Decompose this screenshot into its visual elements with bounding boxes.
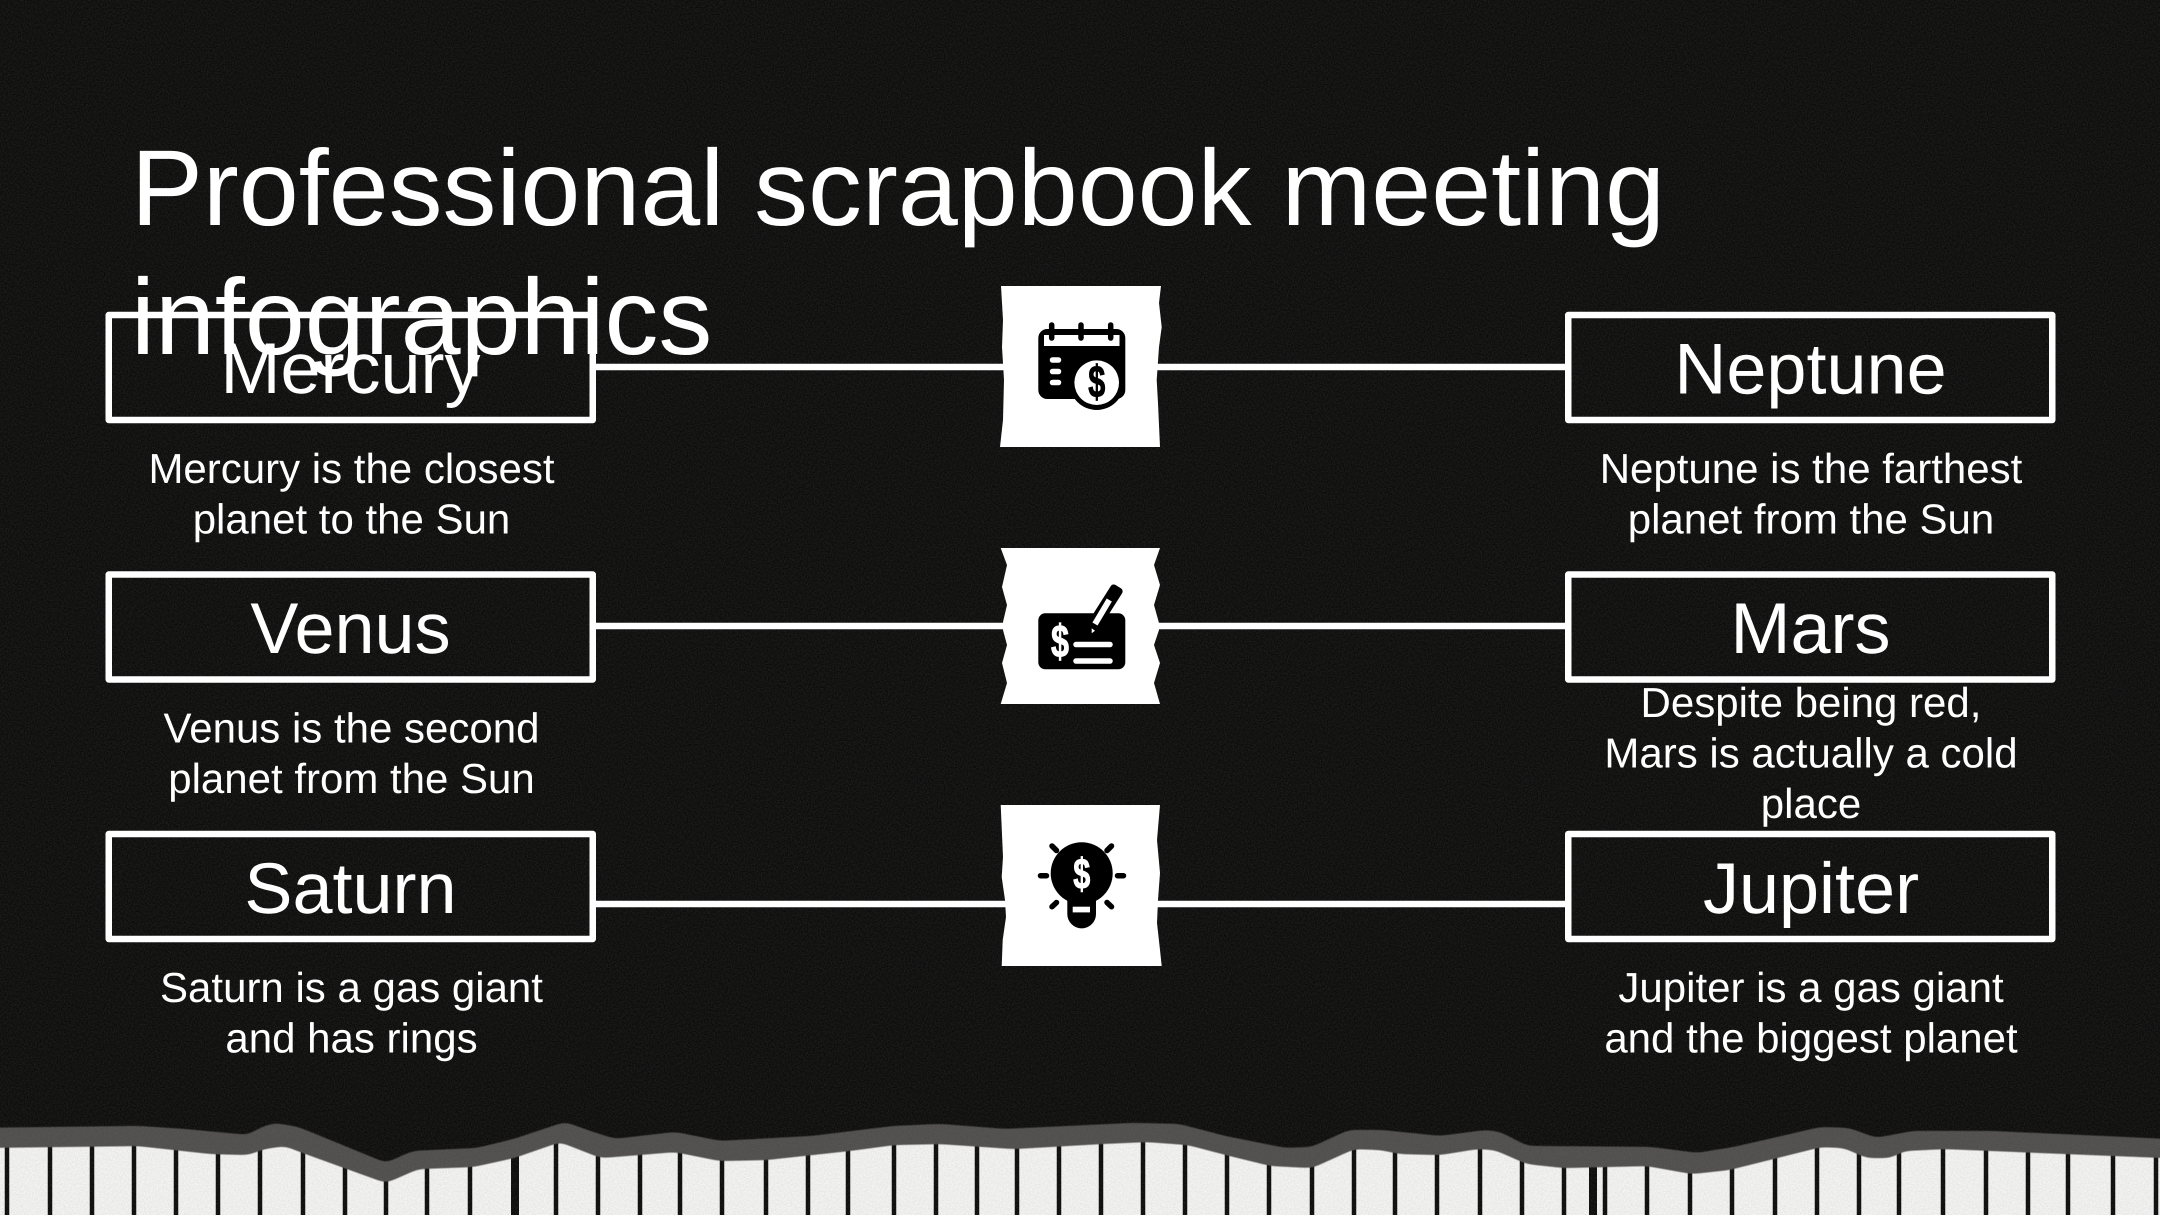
panel: Mercury [109, 315, 593, 542]
title: Professional scrapbook meeting [131, 127, 1665, 248]
Mercury name: Mercury [220, 329, 481, 409]
panel: Jupiter [1568, 834, 2052, 1061]
Mars box [1568, 574, 2052, 680]
Neptune description: planet from the Sun [1628, 495, 1994, 542]
Neptune box [1568, 315, 2052, 420]
Jupiter description: and the biggest planet [1604, 1014, 2018, 1061]
grey torn edge [0, 1123, 2160, 1182]
torn paper strip at bottom [0, 1123, 2160, 1215]
panel: Mars [1568, 574, 2052, 827]
Mars name: Mars [1730, 589, 1890, 669]
title: infographics [131, 256, 712, 377]
icon: cheque with pen: $ [1051, 615, 1069, 667]
Saturn description: and has rings [225, 1014, 478, 1061]
Mercury description: Mercury is the closest [148, 445, 555, 492]
Venus description: Venus is the second [164, 704, 539, 752]
icon: light bulb with dollar [1001, 805, 1162, 966]
white striped paper [0, 1135, 2160, 1215]
Venus description: planet from the Sun [168, 755, 535, 802]
panel: Venus [109, 574, 593, 802]
icon: light bulb with dollar: $ [1073, 850, 1090, 898]
Neptune description: Neptune is the farthest [1600, 445, 2023, 492]
Jupiter description: Jupiter is a gas giant [1618, 964, 2004, 1011]
Jupiter box [1568, 834, 2052, 939]
panel: Saturn [109, 834, 593, 1061]
panel: Neptune [1568, 315, 2052, 542]
Venus name: Venus [250, 589, 451, 669]
icon: cheque with pen [1001, 548, 1160, 704]
Mercury description: planet to the Sun [193, 495, 510, 542]
Mars description: Despite being red, [1641, 679, 1981, 726]
Saturn description: Saturn is a gas giant [160, 964, 543, 1011]
icon: calendar with dollar: $ [1088, 356, 1105, 407]
Neptune name: Neptune [1674, 330, 1947, 410]
Venus box [109, 574, 593, 680]
Mars description: Mars is actually a cold [1604, 729, 2018, 776]
connector lines [595, 367, 1565, 904]
Mars description: place [1761, 780, 1861, 827]
Saturn box [109, 834, 593, 939]
Mercury box [109, 315, 593, 420]
icon: calendar with dollar [1000, 286, 1162, 447]
Jupiter name: Jupiter [1703, 849, 1919, 929]
Saturn name: Saturn [244, 849, 457, 929]
